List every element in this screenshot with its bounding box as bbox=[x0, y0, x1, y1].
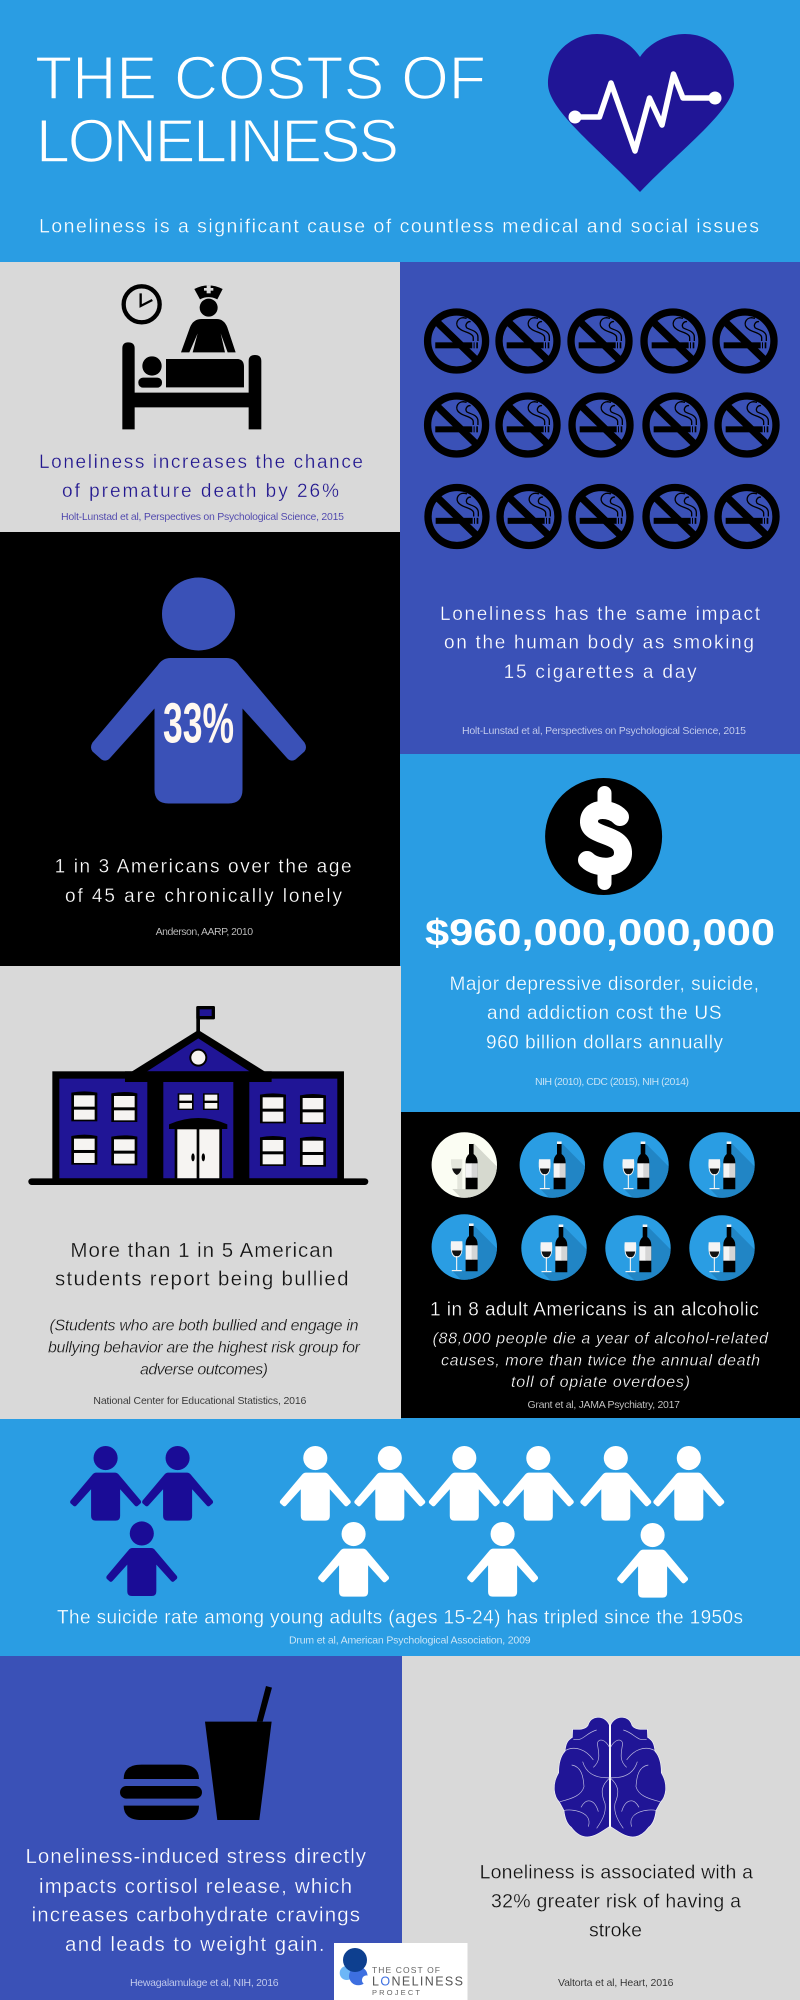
icon: highlighted wine circle bbox=[432, 1132, 497, 1198]
panel: stroke risk bbox=[402, 1656, 800, 2000]
source: Valtorta et al, Heart, 2016 bbox=[558, 1977, 674, 1989]
heading: on the human body as smoking bbox=[444, 633, 754, 654]
icon group: white figures bbox=[280, 1446, 724, 1598]
panel: premature death bbox=[0, 262, 400, 532]
heading: 15 cigarettes a day bbox=[504, 662, 697, 683]
description: and leads to weight gain. bbox=[65, 1933, 324, 1956]
icon: heart with heartbeat bbox=[548, 34, 734, 192]
heading: of 45 are chronically lonely bbox=[65, 886, 342, 907]
heading: students report being bullied bbox=[55, 1268, 348, 1291]
italic note: causes, more than twice the annual death bbox=[441, 1353, 760, 1370]
heading bbox=[55, 856, 352, 907]
panel: header bbox=[0, 0, 800, 263]
logo: The Cost of Loneliness Project: PROJECT bbox=[372, 1988, 420, 1997]
logo: The Cost of Loneliness Project bbox=[334, 1943, 468, 2000]
heading: Loneliness increases the chance bbox=[39, 452, 363, 473]
icon grid: no smoking bbox=[428, 312, 776, 545]
source: Grant et al, JAMA Psychiatry, 2017 bbox=[528, 1399, 680, 1411]
panel: weight gain bbox=[0, 1656, 402, 2000]
heading bbox=[55, 1239, 348, 1291]
description: Loneliness is associated with a bbox=[480, 1862, 753, 1884]
icon: person with 33 percent: 33% bbox=[163, 691, 234, 755]
source: NIH (2010), CDC (2015), NIH (2014) bbox=[535, 1076, 689, 1088]
source: Holt-Lunstad et al, Perspectives on Psychological Science, 2015 bbox=[61, 511, 344, 523]
logo: The Cost of Loneliness Project: THE COST OF bbox=[372, 1965, 440, 1975]
icon: brain bbox=[554, 1717, 666, 1837]
heading: 1 in 3 Americans over the age bbox=[55, 856, 352, 878]
subtitle: Loneliness is a significant cause of countless medical and social issues bbox=[39, 216, 759, 238]
italic note bbox=[48, 1318, 361, 1379]
source: Holt-Lunstad et al, Perspectives on Psychological Science, 2015 bbox=[462, 725, 746, 737]
description: stroke bbox=[589, 1920, 642, 1942]
italic note bbox=[433, 1331, 769, 1391]
source: Anderson, AARP, 2010 bbox=[156, 926, 253, 938]
big number: $960,000,000,000 bbox=[425, 912, 775, 953]
description: and addiction cost the US bbox=[487, 1003, 722, 1024]
panel: financial cost bbox=[400, 754, 800, 1112]
description bbox=[480, 1862, 753, 1942]
description: impacts cortisol release, which bbox=[39, 1875, 352, 1898]
italic note: toll of opiate overdoes) bbox=[511, 1374, 690, 1391]
description: 960 billion dollars annually bbox=[486, 1032, 724, 1054]
icon: burger and drink bbox=[120, 1686, 272, 1820]
heading: Loneliness has the same impact bbox=[440, 604, 761, 625]
title: LONELINESS bbox=[36, 107, 399, 175]
icon: person with 33 percent bbox=[91, 578, 306, 804]
heading: of premature death by 26% bbox=[62, 481, 339, 502]
panel: smoking bbox=[400, 262, 800, 754]
description bbox=[26, 1845, 367, 1956]
title: THE COSTS OF bbox=[35, 44, 486, 112]
title bbox=[35, 44, 486, 175]
description: Major depressive disorder, suicide, bbox=[450, 974, 759, 995]
icon: dollar coin bbox=[545, 778, 662, 895]
italic note: adverse outcomes) bbox=[140, 1362, 268, 1379]
panel: bullying bbox=[0, 966, 401, 1420]
source: Drum et al, American Psychological Association, 2009 bbox=[289, 1634, 531, 1646]
heading bbox=[440, 604, 761, 683]
description bbox=[450, 974, 759, 1054]
heading: The suicide rate among young adults (ages 15-24) has tripled since the 1950s bbox=[57, 1608, 743, 1628]
panel: alcoholism bbox=[401, 1112, 800, 1418]
italic note: bullying behavior are the highest risk group for bbox=[48, 1339, 361, 1356]
description: 32% greater risk of having a bbox=[491, 1891, 741, 1913]
panel: suicide rate bbox=[0, 1419, 800, 1656]
heading: More than 1 in 5 American bbox=[70, 1239, 333, 1262]
icon grid: wine circles bbox=[432, 1132, 767, 1293]
source: National Center for Educational Statistics, 2016 bbox=[93, 1395, 307, 1407]
icon: school building bbox=[28, 1006, 368, 1185]
heading bbox=[39, 452, 363, 502]
italic note: (Students who are both bullied and engage in bbox=[50, 1318, 359, 1334]
italic note: (88,000 people die a year of alcohol-related bbox=[433, 1331, 769, 1348]
heading: 1 in 8 adult Americans is an alcoholic bbox=[430, 1300, 759, 1321]
icon group: dark figures bbox=[70, 1446, 213, 1596]
source: Hewagalamulage et al, NIH, 2016 bbox=[130, 1977, 279, 1989]
logo: The Cost of Loneliness Project: LONELINESS bbox=[372, 1975, 463, 1989]
description: increases carbohydrate cravings bbox=[32, 1903, 360, 1926]
panel: chronic loneliness bbox=[0, 532, 400, 966]
icon: hospital bed with nurse and clock bbox=[122, 285, 261, 429]
description: Loneliness-induced stress directly bbox=[26, 1845, 367, 1868]
